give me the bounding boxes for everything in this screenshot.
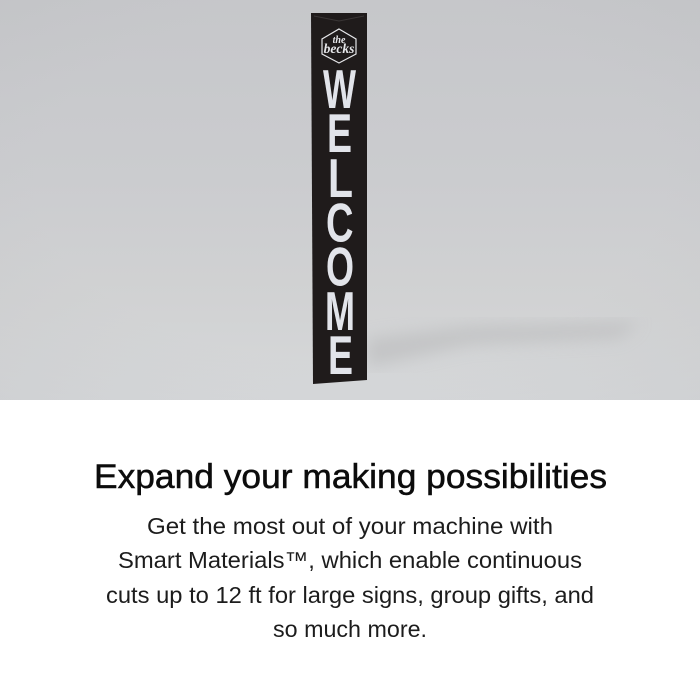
body line 2: Smart Materials™, which enable continuous [118,547,582,573]
letter L: L [328,147,353,209]
body line 3: cuts up to 12 ft for large signs, group gifts, and [106,582,594,608]
photo panel [0,0,700,400]
body line 1: Get the most out of your machine with [147,513,553,539]
logo hexagon [322,29,356,63]
sign board [311,13,367,384]
body line 4: so much more. [273,616,427,642]
body text [106,513,594,642]
sign shadow [367,322,640,368]
photo backdrop [0,0,700,400]
logo word: the: the [333,35,346,46]
welcome sign [311,13,367,386]
letter E: E [328,324,353,386]
letter M: M [325,280,355,342]
letter O: O [326,236,354,298]
sign top fold [314,16,364,21]
logo: the becks [322,29,356,63]
heading: Expand your making possibilities [94,458,607,496]
logo word: becks: becks [324,41,354,56]
letter C: C [326,192,354,254]
sign letters [323,58,356,386]
letter E: E [327,102,352,164]
letter W: W [323,58,356,120]
